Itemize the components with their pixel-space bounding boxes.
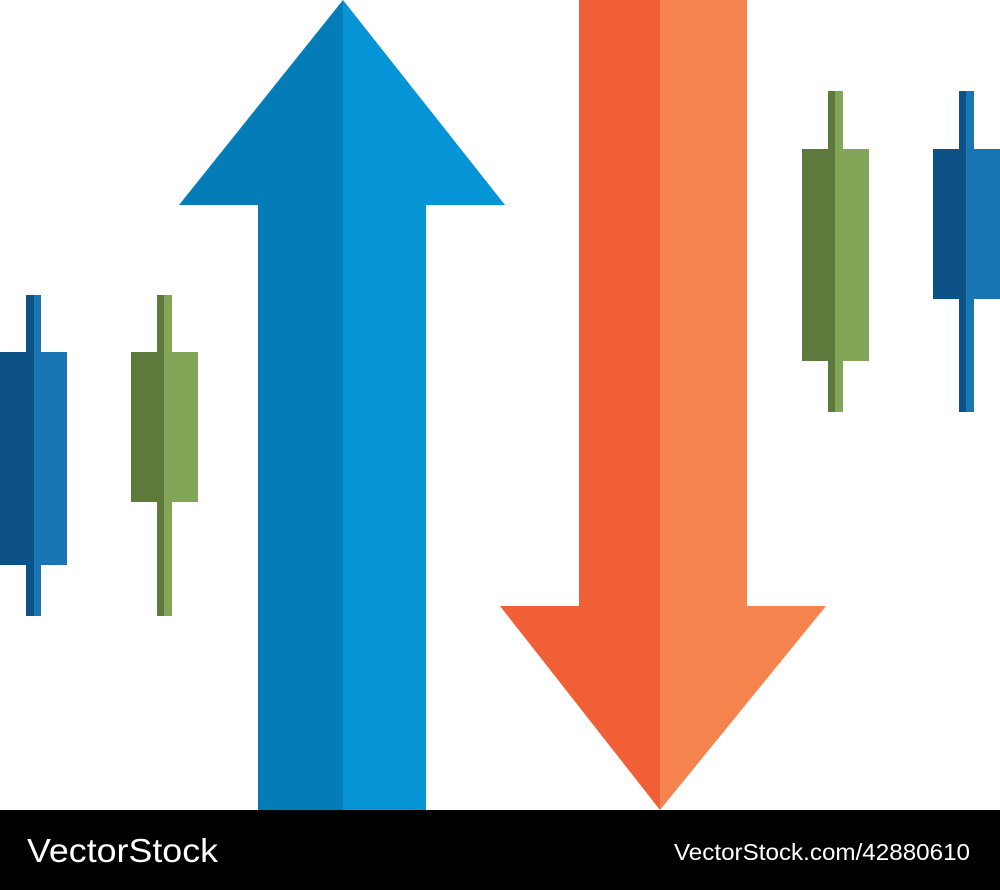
footer logo text: VectorStock	[27, 832, 219, 869]
arrow: orange down	[500, 0, 826, 810]
candlestick: green right	[802, 91, 869, 412]
candlestick: blue left	[0, 295, 67, 616]
arrow: blue up	[179, 0, 505, 810]
candlestick: green left	[131, 295, 198, 616]
footer id text: VectorStock.com/42880610	[674, 839, 970, 865]
footer bar	[0, 810, 1000, 890]
candlestick: blue right	[933, 91, 1000, 412]
